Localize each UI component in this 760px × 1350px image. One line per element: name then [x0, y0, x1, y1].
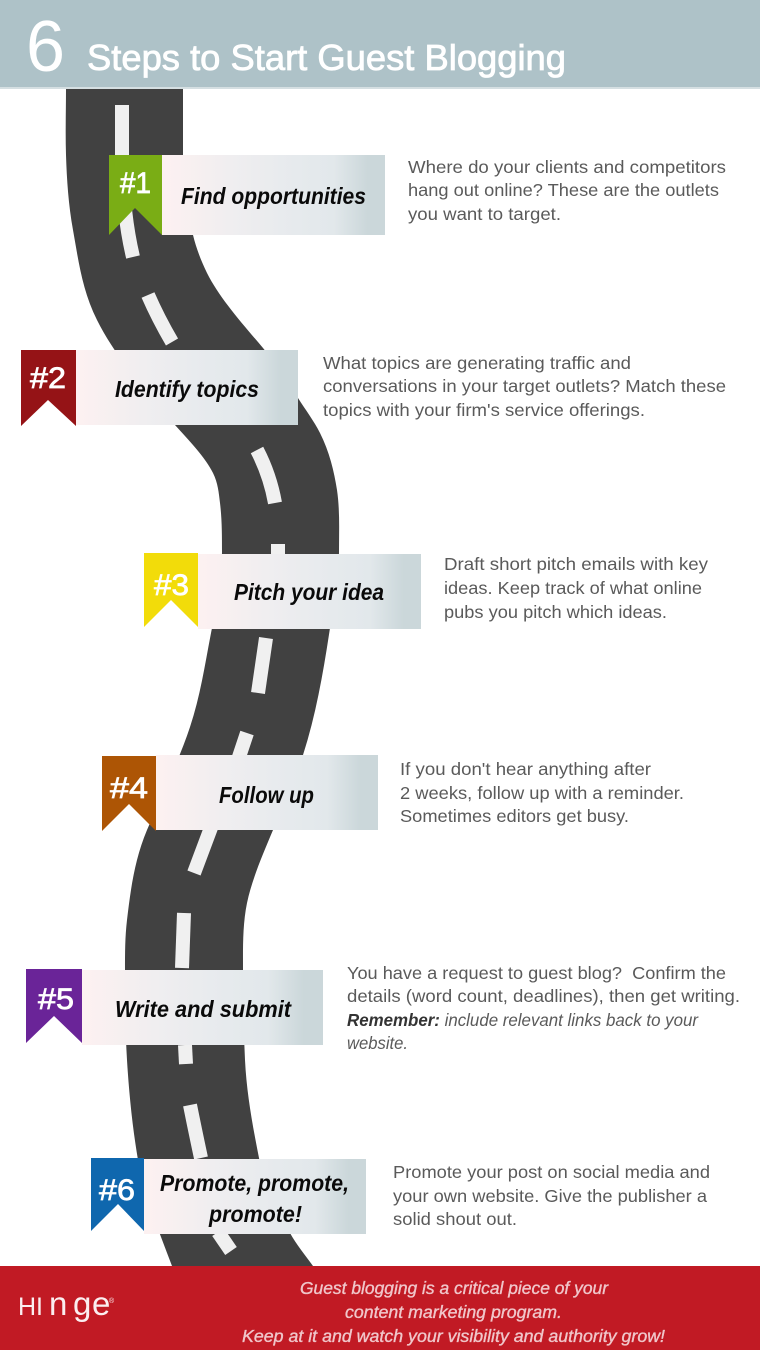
- step 4: #4: [110, 772, 148, 805]
- footer band: [0, 1266, 760, 1350]
- footer message: Guest blogging is a critical piece of your: [300, 1278, 609, 1298]
- title: Steps to Start Guest Blogging: [87, 37, 566, 78]
- step 5: details (word count, deadlines), then get writing.: [347, 986, 740, 1006]
- step 2: What topics are generating traffic and: [323, 353, 631, 373]
- step 2: #2: [30, 362, 66, 395]
- step 1: you want to target.: [408, 204, 561, 224]
- logo: Hinge: HI: [18, 1293, 43, 1321]
- step 3: Draft short pitch emails with key: [444, 554, 708, 574]
- step 2: topics with your firm's service offerings.: [323, 400, 645, 420]
- step 2: [21, 350, 726, 426]
- step 2: Identify topics: [115, 376, 259, 402]
- step 3: [144, 553, 708, 629]
- step 1: #1: [120, 167, 151, 200]
- footer message: Keep at it and watch your visibility and authority grow!: [242, 1326, 665, 1346]
- footer message: content marketing program.: [345, 1302, 562, 1322]
- step 4: 2 weeks, follow up with a reminder.: [400, 783, 684, 803]
- step 6: Promote your post on social media and: [393, 1162, 710, 1182]
- logo: Hinge: ®: [109, 1297, 115, 1305]
- step 1: hang out online? These are the outlets: [408, 180, 719, 200]
- step 5: [26, 963, 740, 1053]
- step 2: conversations in your target outlets? Match these: [323, 376, 726, 396]
- step 3: #3: [154, 569, 189, 602]
- logo: Hinge: nge: [49, 1285, 110, 1322]
- step 3: Pitch your idea: [234, 579, 384, 605]
- step 4: [102, 755, 684, 831]
- step 1: Where do your clients and competitors: [408, 157, 726, 177]
- step 5: #5: [38, 983, 74, 1016]
- step 3: ideas. Keep track of what online: [444, 578, 702, 598]
- step 6: #6: [99, 1174, 135, 1207]
- step 5: You have a request to guest blog? Confirm the: [347, 963, 726, 983]
- title: [26, 7, 566, 87]
- step 5: Write and submit: [115, 996, 292, 1022]
- step 5: Remember: include relevant links back to your: [347, 1010, 699, 1030]
- header band: [0, 0, 760, 89]
- step 4: Follow up: [219, 782, 314, 808]
- step 6: Promote, promote,: [160, 1170, 349, 1196]
- footer message: [242, 1278, 665, 1346]
- step 4: If you don't hear anything after: [400, 759, 651, 779]
- road: [66, 88, 339, 1266]
- step 3: pubs you pitch which ideas.: [444, 602, 667, 622]
- step 6: promote!: [208, 1201, 302, 1227]
- step 6: solid shout out.: [393, 1209, 517, 1229]
- step 6: your own website. Give the publisher a: [393, 1186, 707, 1206]
- step 6: [91, 1158, 710, 1234]
- title: 6: [26, 7, 65, 87]
- step 5: website.: [347, 1033, 408, 1053]
- logo: Hinge: [18, 1285, 115, 1322]
- step 4: Sometimes editors get busy.: [400, 806, 629, 826]
- step 1: Find opportunities: [181, 183, 366, 209]
- step 1: [109, 155, 726, 235]
